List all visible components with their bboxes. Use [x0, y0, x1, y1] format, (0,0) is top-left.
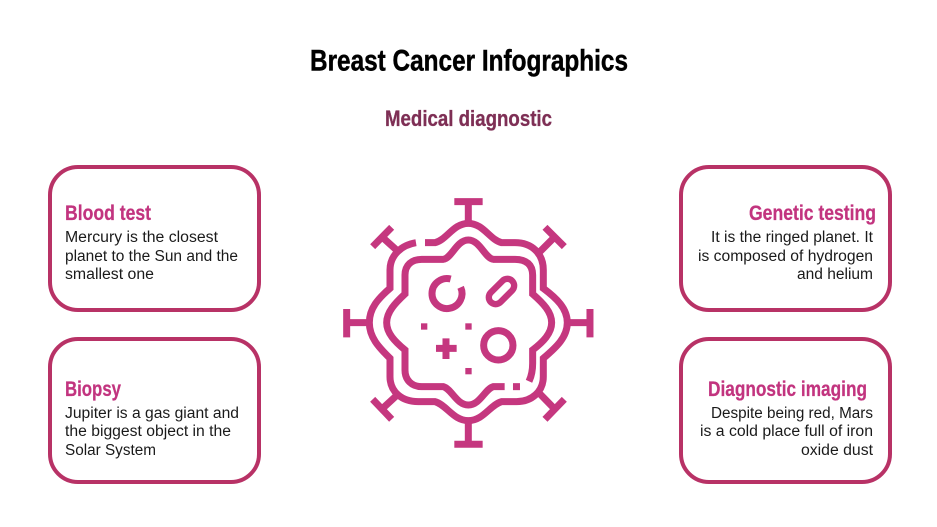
membrane fragment	[513, 376, 520, 397]
cell outer membrane	[369, 223, 567, 421]
text block: diagnostic imaging	[700, 405, 874, 459]
text block: diagnostic imaging: Despite being red, Mars	[711, 405, 873, 422]
spike top left	[373, 227, 398, 252]
spike left	[347, 309, 368, 337]
card outline: blood test	[50, 167, 259, 310]
spike bottom left	[373, 394, 398, 419]
text block: biopsy	[65, 405, 239, 459]
subtitle: Medical diagnostic	[385, 106, 552, 131]
card outline: genetic testing	[681, 167, 890, 310]
spike top	[454, 202, 483, 222]
text block: biopsy: Solar System	[65, 442, 156, 459]
text block: genetic testing: It is the ringed planet. It	[711, 229, 874, 246]
text block: blood test: planet to the Sun and the	[65, 248, 238, 265]
ring organelle	[484, 331, 513, 360]
pill organelle	[496, 286, 507, 297]
panel: genetic testing	[681, 167, 890, 310]
text block: diagnostic imaging: oxide dust	[801, 442, 874, 459]
cell inner membrane	[387, 240, 552, 405]
text block: genetic testing: is composed of hydrogen	[698, 248, 873, 265]
icon: cancer cell	[347, 202, 590, 444]
text block: biopsy: the biggest object in the	[65, 423, 231, 440]
spike right	[568, 309, 590, 337]
open ring organelle	[432, 279, 462, 309]
spike top right	[540, 227, 564, 252]
spike bottom right	[540, 394, 564, 419]
heading: biopsy: Biopsy	[65, 378, 121, 401]
text block: genetic testing	[698, 229, 874, 283]
heading: genetic testing: Genetic testing	[749, 202, 876, 225]
spike bottom	[454, 422, 483, 444]
panel: blood test	[50, 167, 259, 310]
dots	[421, 323, 472, 374]
text block: blood test	[65, 229, 238, 283]
heading: blood test: Blood test	[65, 202, 151, 225]
card outline: biopsy	[50, 339, 259, 482]
card outline: diagnostic imaging	[681, 339, 890, 482]
heading: diagnostic imaging: Diagnostic imaging	[708, 378, 867, 401]
text block: diagnostic imaging: is a cold place full of iron	[700, 423, 873, 440]
text block: genetic testing: and helium	[797, 266, 873, 283]
panel: biopsy	[50, 339, 259, 482]
text block: blood test: Mercury is the closest	[65, 229, 219, 246]
text block: biopsy: Jupiter is a gas giant and	[65, 405, 239, 422]
title: Breast Cancer Infographics	[310, 44, 628, 78]
text block: blood test: smallest one	[65, 266, 154, 283]
pill organelle hollow	[496, 286, 507, 297]
panel: diagnostic imaging	[681, 339, 890, 482]
plus sign	[436, 338, 457, 359]
